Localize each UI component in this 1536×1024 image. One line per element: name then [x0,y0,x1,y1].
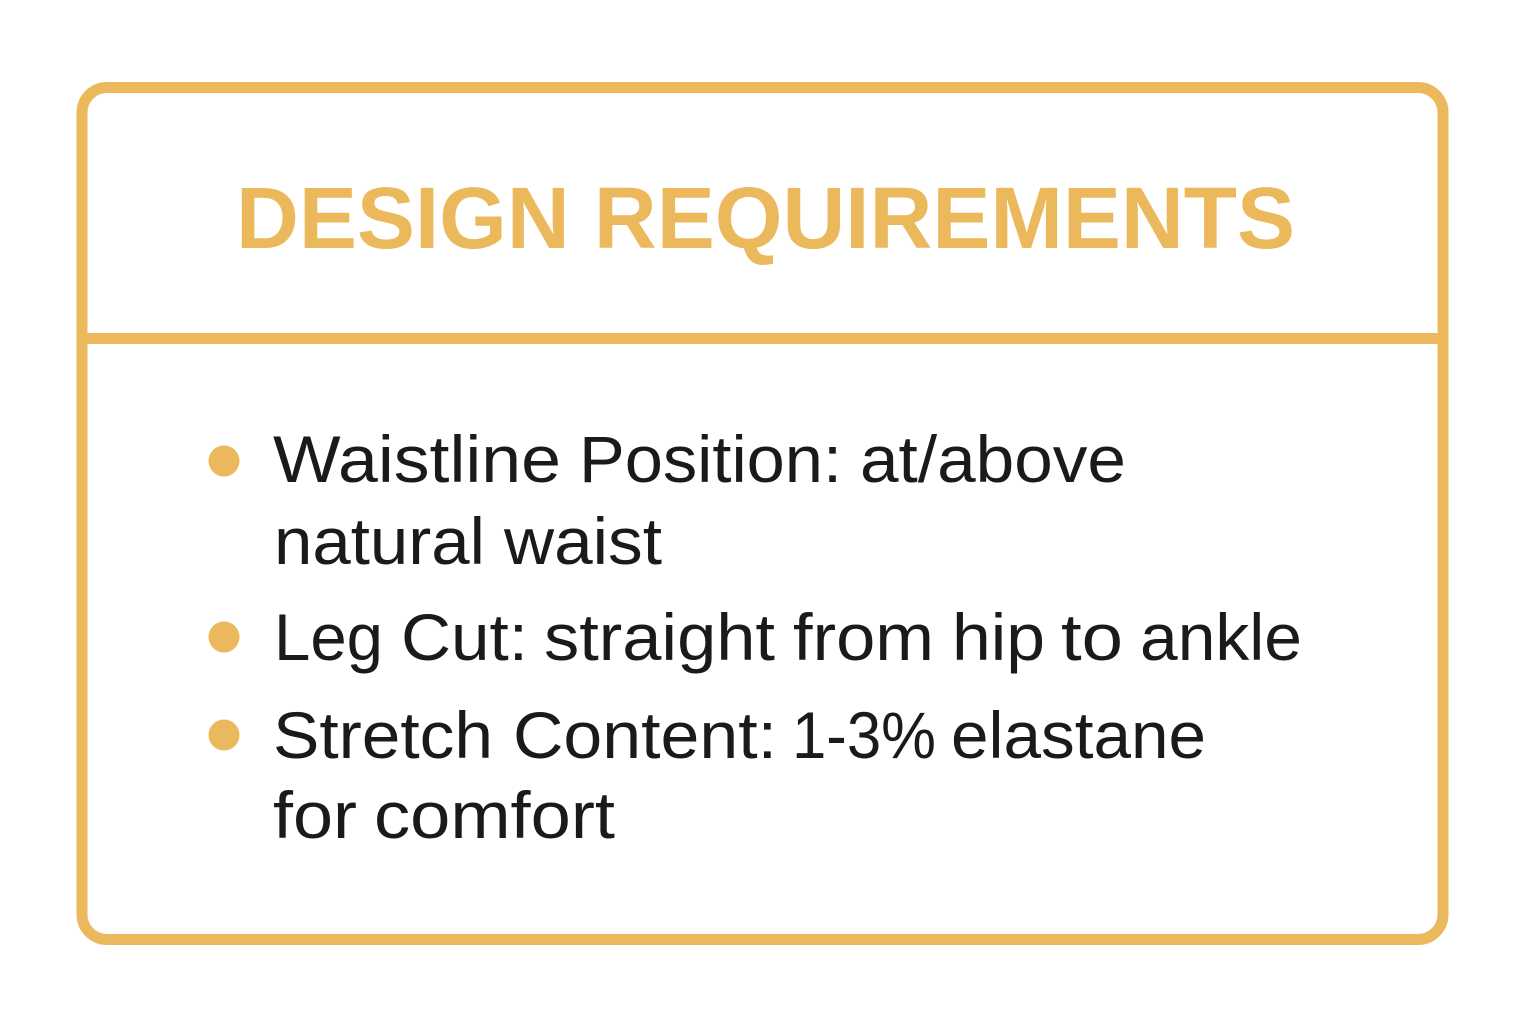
list item: waistline position [208,422,1126,578]
list item: stretch content [208,698,1206,852]
list item: leg cut: hip [952,600,1045,674]
list item: waistline position: natural [274,504,485,578]
list item: stretch content: for [273,778,357,852]
panel: design requirements card [82,88,1443,940]
list item: leg cut: Cut: [401,600,528,674]
list item: stretch content: Content: [513,698,777,772]
list item: waistline position: waist [503,504,662,578]
list item: leg cut: Leg [274,600,383,674]
list item: leg cut [208,600,1302,674]
list item: waistline position: Position: [579,422,842,496]
requirements list [208,422,1302,852]
list item: leg cut: to [1061,600,1123,674]
list item: stretch content: elastane [951,698,1206,772]
list item: stretch content: comfort [374,778,615,852]
list item: waistline position: at/above [860,422,1126,496]
list item: leg cut: from [793,600,934,674]
list item: leg cut: straight [544,600,775,674]
list item: waistline position: Waistline [273,422,561,496]
list item: leg cut: ankle [1140,600,1302,674]
list item: stretch content: Stretch [273,698,493,772]
list item: stretch content: 1-3% [792,698,936,772]
title: DESIGN REQUIREMENTS [236,170,1295,267]
